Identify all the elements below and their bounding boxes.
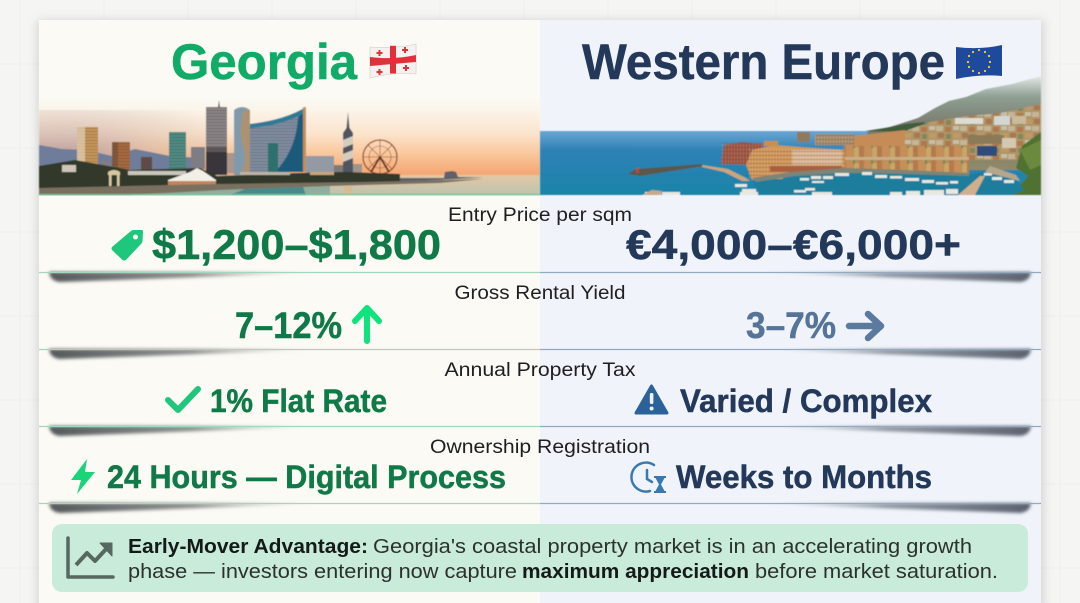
- row: entry price per sqm: [112, 205, 961, 268]
- row: gross rental yield: [235, 283, 881, 346]
- image: Monaco harbour and hillside: [540, 76, 1041, 195]
- value: Georgia registration: 24 Hours — Digital Process: [107, 459, 506, 495]
- title: Georgia: Georgia: [171, 34, 358, 90]
- value: Europe registration: Weeks to Months: [676, 459, 932, 495]
- icon: lightning bolt: [71, 459, 95, 494]
- row divider lines: [39, 272, 1041, 504]
- icon: EU flag: [956, 45, 1002, 79]
- icon: growth chart: [68, 538, 113, 577]
- callout text: Early-Mover Advantage:: [128, 535, 368, 558]
- icon: Georgian flag: [370, 44, 416, 78]
- callout: early-mover advantage: [52, 524, 1028, 592]
- icon: up arrow: [355, 308, 379, 341]
- title: Western Europe: Western Europe: [582, 34, 945, 90]
- icon: price tag: [112, 230, 143, 260]
- value: Europe tax: Varied / Complex: [680, 383, 932, 419]
- icon: ferris wheel: [363, 140, 397, 174]
- value: Georgia entry price: $1,200–$1,800: [152, 221, 441, 268]
- callout text: [128, 535, 998, 583]
- callout text: before market saturation.: [755, 560, 998, 583]
- label: ownership registration: Ownership Registration: [430, 437, 650, 458]
- value: Georgia yield: 7–12%: [235, 305, 342, 346]
- label: entry price: Entry Price per sqm: [448, 205, 632, 226]
- callout text: Georgia's coastal property market is in an accelerating growth: [373, 535, 972, 558]
- callout text: maximum appreciation: [522, 560, 749, 583]
- icon: check mark: [168, 389, 198, 410]
- value: Europe entry price: €4,000–€6,000+: [626, 221, 961, 268]
- row: ownership registration: [71, 437, 932, 495]
- icon: clock and hourglass: [631, 463, 666, 493]
- panel: Georgia column: [39, 20, 540, 603]
- image: Batumi coastal skyline at sunset: [39, 98, 540, 195]
- row divider shadows: [49, 272, 1031, 513]
- callout text: phase — investors entering now capture: [128, 560, 517, 583]
- icon: right arrow: [849, 314, 881, 338]
- icon: warning triangle: [636, 386, 667, 413]
- label: rental yield: Gross Rental Yield: [454, 283, 626, 304]
- panel: Western Europe column: [540, 20, 1041, 603]
- label: property tax: Annual Property Tax: [444, 360, 636, 381]
- row: annual property tax: [168, 360, 932, 419]
- marina boats: [645, 172, 1014, 195]
- value: Europe yield: 3–7%: [746, 305, 836, 346]
- value: Georgia tax: 1% Flat Rate: [210, 383, 387, 419]
